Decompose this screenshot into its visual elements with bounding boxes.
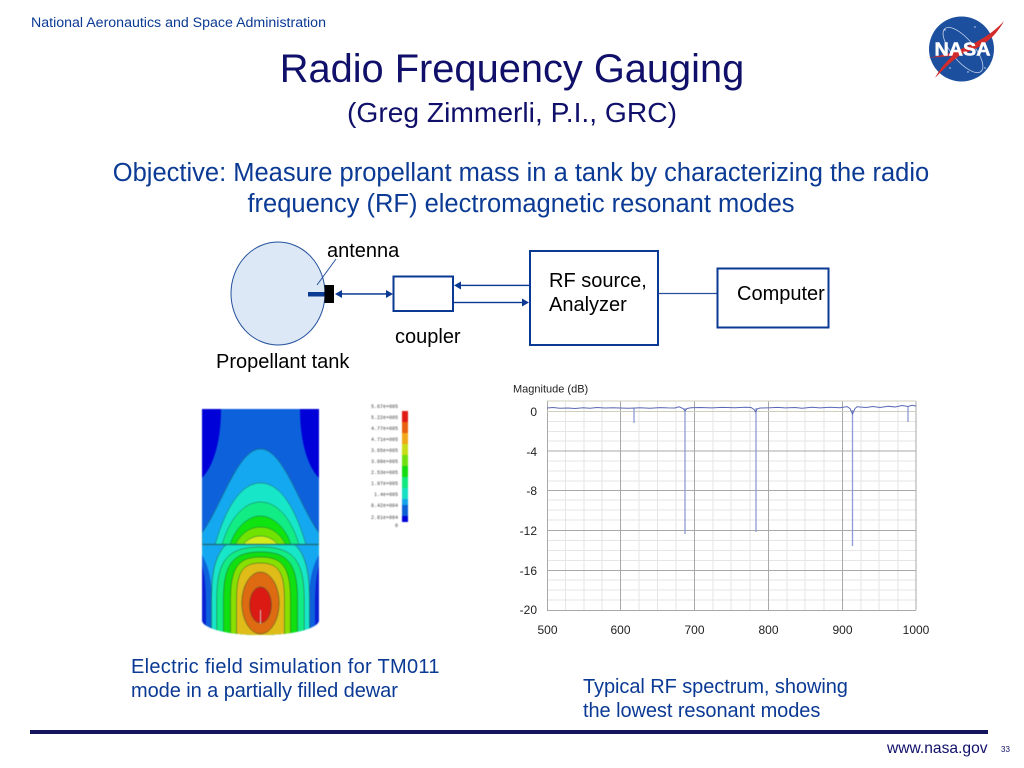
chart: electric field simulation (201, 404, 409, 636)
connector line (659, 292, 717, 294)
icon: NASA logo: NASA (934, 40, 990, 60)
caption: spectrum: the lowest resonant modes (583, 700, 820, 722)
legend values: 4.77e+005 (371, 426, 398, 432)
y axis labels: -12 (520, 524, 537, 538)
x axis labels: 900 (832, 623, 853, 637)
lower contours (202, 544, 320, 636)
x axis labels: 1000 (903, 623, 930, 637)
y axis labels: -4 (526, 445, 537, 459)
legend values: 5.67e+005 (371, 404, 398, 410)
computer box (718, 268, 828, 328)
footer rule (30, 730, 988, 734)
y axis title: Magnitude (dB) (513, 384, 588, 396)
arrow: coupler to analyzer (454, 298, 529, 306)
major grid (547, 401, 916, 610)
label: RF source: Analyzer (549, 294, 627, 316)
label: coupler: coupler (395, 326, 461, 348)
coupler box (394, 276, 453, 311)
legend values: 2.81e+004 (371, 515, 398, 521)
y axis labels: -20 (520, 603, 537, 617)
legend values: 8.42e+004 (371, 503, 398, 509)
caption: simulation: mode in a partially filled dewar (131, 680, 398, 702)
x axis labels: 800 (758, 623, 779, 637)
header: agency name: National Aeronautics and Space Administration (31, 15, 326, 31)
footer: page number: 33 (1001, 745, 1010, 754)
label: computer: Computer (737, 283, 825, 305)
y axis labels: -8 (526, 484, 537, 498)
objective text: frequency (RF) electromagnetic resonant modes (247, 190, 795, 218)
legend values: 1.4e+005 (374, 492, 398, 498)
spectrum trace (547, 405, 916, 414)
legend values: 2.53e+005 (371, 470, 398, 476)
RF source box (530, 251, 658, 345)
antenna probe (308, 285, 334, 303)
upper contours (202, 409, 319, 545)
legend values: 3.09e+005 (371, 459, 398, 465)
label: RF source: RF source, (549, 270, 647, 292)
antenna leader line (317, 259, 336, 285)
minor grid (547, 401, 916, 610)
caption: spectrum: Typical RF spectrum, showing (583, 676, 848, 698)
title: Radio Frequency Gauging (280, 47, 744, 91)
caption: spectrum (583, 676, 848, 722)
x axis labels: 700 (684, 623, 705, 637)
y axis labels: -16 (520, 564, 537, 578)
label: RF source (549, 270, 647, 316)
legend values: 0 (395, 523, 398, 529)
legend values: 5.22e+005 (371, 415, 398, 421)
legend color bar (402, 411, 408, 522)
footer: website: www.nasa.gov (887, 740, 988, 757)
arrow: antenna to coupler (335, 290, 393, 298)
propellant tank (231, 242, 325, 345)
y axis labels (520, 405, 537, 617)
objective text (113, 159, 929, 218)
x axis labels: 600 (610, 623, 631, 637)
label: antenna: antenna (327, 240, 399, 262)
x axis labels: 500 (537, 623, 558, 637)
caption: simulation (131, 656, 440, 702)
diagram: RF gauging block diagram (230, 242, 830, 346)
spectrum dips (634, 407, 908, 546)
legend values: 1.97e+005 (371, 481, 398, 487)
subtitle: (Greg Zimmerli, P.I., GRC) (347, 96, 677, 128)
caption: simulation: Electric field simulation for TM011 (131, 656, 440, 678)
icon: NASA logo (926, 16, 1004, 82)
legend values: 4.71e+005 (371, 437, 398, 443)
objective text: Objective: Measure propellant mass in a tank by characterizing the radio (113, 159, 929, 187)
arrow: analyzer to coupler (454, 282, 530, 290)
legend values (371, 404, 398, 529)
y axis labels: 0 (530, 405, 537, 419)
legend values: 3.65e+005 (371, 448, 398, 454)
label: propellant tank: Propellant tank (216, 351, 349, 373)
x axis labels (537, 623, 930, 637)
